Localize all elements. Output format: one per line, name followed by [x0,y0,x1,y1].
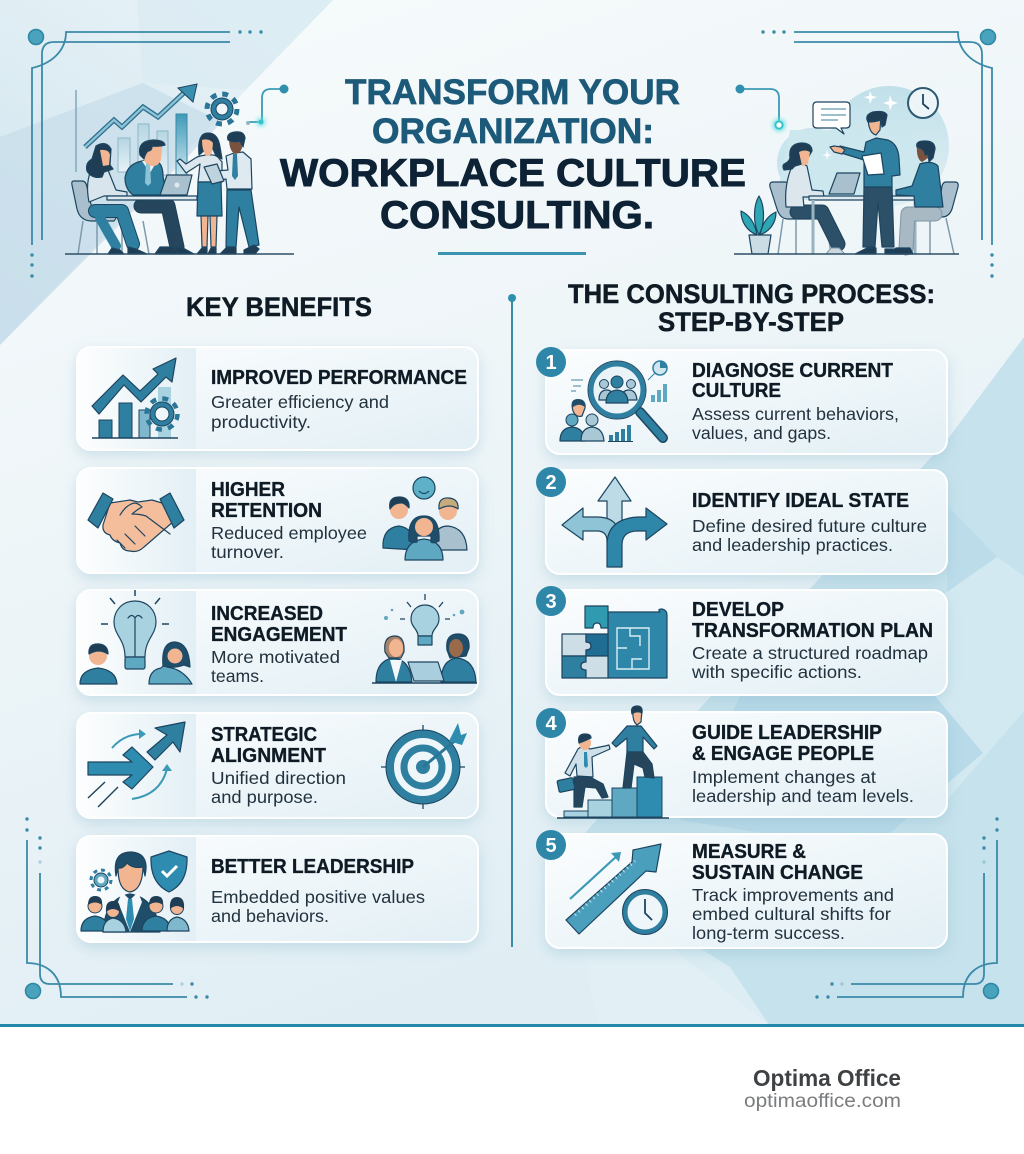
circuit connector: right [736,84,785,131]
illustration: consultant presenting at a table [734,86,959,254]
badge: number 5: 5 [545,835,557,857]
text: step 2 [692,490,927,555]
centre divider [508,294,516,947]
text: better leadership [211,856,425,926]
text: strategic alignment: ALIGNMENT [211,745,326,767]
icon: growth chart and gear [92,358,178,438]
icon: lightbulb with two people [80,590,192,684]
text: higher retention: HIGHER [211,479,286,501]
heading: the consulting process [568,279,935,337]
icon: collaboration at laptop [372,594,477,683]
step 1: diagnose current culture [536,347,947,454]
text: increased engagement: More motivated [211,647,340,667]
title: ORGANIZATION: [372,112,654,151]
panel: consulting process [536,347,947,948]
decorative corner frame: top left [28,30,263,278]
badge: number 3 [536,586,566,616]
step 3: develop transformation plan [536,586,947,695]
icon: happy team [383,477,467,560]
text: step 5: embed cultural shifts for [692,904,891,924]
text: step 4 [692,722,914,806]
text: strategic alignment: STRATEGIC [211,724,317,746]
text: step 1: CULTURE [692,380,781,402]
text: step 5: Track improvements and [692,885,894,905]
text: step 5: MEASURE & [692,841,806,863]
text: step 4: & ENGAGE PEOPLE [692,743,874,765]
footer brand: optimaoffice.com [744,1090,901,1112]
text: step 2: and leadership practices. [692,535,893,555]
badge: number 5 [536,830,566,860]
text: better leadership: and behaviors. [211,906,329,926]
title: CONSULTING. [380,194,654,237]
step 4: guide leadership and engage people [536,706,947,818]
text: step 4: GUIDE LEADERSHIP [692,722,882,744]
badge: number 4 [536,708,566,738]
text: step 3: TRANSFORMATION PLAN [692,620,933,642]
icon: leader helping climber on steps [557,706,669,818]
text: increased engagement: ENGAGEMENT [211,624,347,646]
title: WORKPLACE CULTURE [280,152,746,195]
text: step 5: long-term success. [692,923,845,943]
panel: key benefits [77,347,478,942]
text: step 2: Define desired future culture [692,516,927,536]
text: step 5: SUSTAIN CHANGE [692,862,863,884]
icon: converging arrows [88,722,185,807]
text: step 3: DEVELOP [692,599,784,621]
text: step 1 [692,360,899,443]
text: strategic alignment: Unified direction [211,768,346,788]
text: improved performance [211,367,467,432]
title underline [438,252,586,255]
icon: puzzle and blueprint [562,606,667,678]
footer band [0,1024,1024,1154]
badge: number 1: 1 [545,352,557,374]
illustration: team meeting with growth chart [65,84,294,254]
text: increased engagement: INCREASED [211,603,323,625]
icon: target with arrow [381,723,467,809]
text: better leadership: BETTER LEADERSHIP [211,856,414,878]
text: improved performance: productivity. [211,412,311,432]
text: step 3 [691,599,933,682]
text: higher retention: Reduced employee [211,523,367,543]
badge: number 4: 4 [545,713,557,735]
card: improved performance [77,347,478,450]
card: higher retention [77,468,478,573]
text: step 3: with specific actions. [691,662,862,682]
text: step 1: values, and gaps. [692,423,831,443]
text: step 5 [692,841,894,943]
text: step 3: Create a structured roadmap [692,643,928,663]
card: strategic alignment [77,713,478,818]
text: higher retention [211,479,367,562]
text: step 4: Implement changes at [692,767,876,787]
card: increased engagement [77,590,478,695]
text: better leadership: Embedded positive values [211,887,425,907]
text: step 1: Assess current behaviors, [692,404,899,424]
card: better leadership [77,836,478,942]
heading: the consulting process: THE CONSULTING PROCESS: [568,279,935,309]
icon: ruler arrow and clock [566,844,668,934]
footer brand [744,1065,901,1112]
heading: the consulting process: STEP-BY-STEP [658,307,844,337]
badge: number 2: 2 [545,472,557,494]
text: increased engagement [211,603,347,686]
badge: number 3: 3 [545,591,557,613]
decorative corner frame: bottom left [25,817,209,999]
text: improved performance: Greater efficiency and [211,392,389,412]
title: TRANSFORM YOUR [345,73,680,112]
step 2: identify ideal state [536,467,947,574]
text: step 1: DIAGNOSE CURRENT [692,360,893,382]
text: higher retention: RETENTION [211,500,322,522]
title [280,73,746,237]
circuit connector: left [246,84,288,126]
footer brand: Optima Office [753,1065,901,1091]
badge: number 1 [536,347,566,377]
icon: leader with team and shield [81,851,189,932]
decorative corner frame: top right [761,30,996,278]
text: step 2: IDENTIFY IDEAL STATE [692,490,909,512]
text: increased engagement: teams. [211,666,264,686]
text: strategic alignment [211,724,346,807]
text: higher retention: turnover. [211,542,284,562]
icon: diverging arrows [562,477,667,567]
text: strategic alignment: and purpose. [211,787,318,807]
text: step 4: leadership and team levels. [692,786,914,806]
icon: handshake [88,493,184,552]
icon: magnifier over people [560,361,667,442]
step 5: measure and sustain change [536,830,947,948]
decorative corner frame: bottom right [815,817,999,999]
badge: number 2 [536,467,566,497]
heading: key benefits: KEY BENEFITS [186,292,372,322]
text: improved performance: IMPROVED PERFORMANCE [211,367,467,389]
